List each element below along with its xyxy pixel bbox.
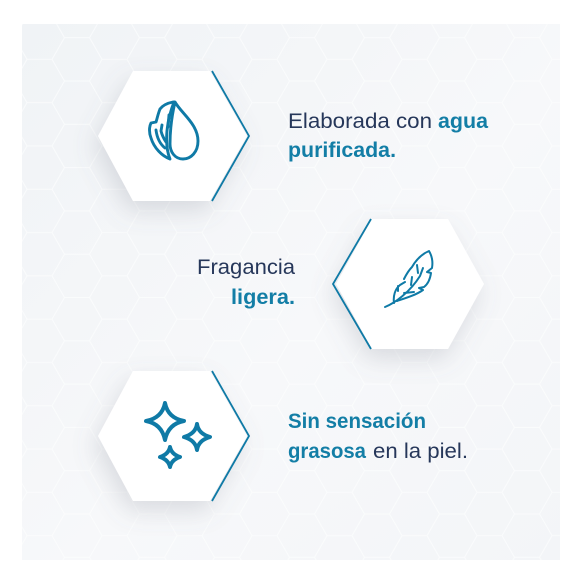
icon: feather	[385, 251, 432, 307]
icon: leaf and water drop	[150, 102, 198, 159]
text 3: grasosa	[288, 439, 367, 463]
text 3: Sin sensación	[288, 409, 426, 433]
item 3: no greasy feeling	[98, 371, 468, 501]
hexagon 3	[98, 371, 247, 501]
text 1: Elaborada con	[288, 109, 432, 133]
text 2: Fragancia	[197, 255, 295, 279]
item 2: light fragrance	[197, 219, 484, 349]
icon: sparkles	[146, 403, 210, 467]
text 2	[197, 255, 295, 309]
text 3	[288, 409, 468, 463]
text 1	[288, 109, 489, 162]
chevron 1	[212, 71, 249, 201]
item 1: purified water	[98, 71, 489, 201]
text 1: purificada.	[288, 138, 396, 162]
hexagon 1	[98, 71, 247, 201]
text 2: ligera.	[231, 285, 295, 309]
chevron 3	[212, 371, 249, 501]
chevron 2	[333, 219, 371, 349]
text 1: agua	[438, 109, 489, 133]
hexagon 2	[336, 219, 484, 349]
text 3: en la piel.	[373, 439, 468, 463]
